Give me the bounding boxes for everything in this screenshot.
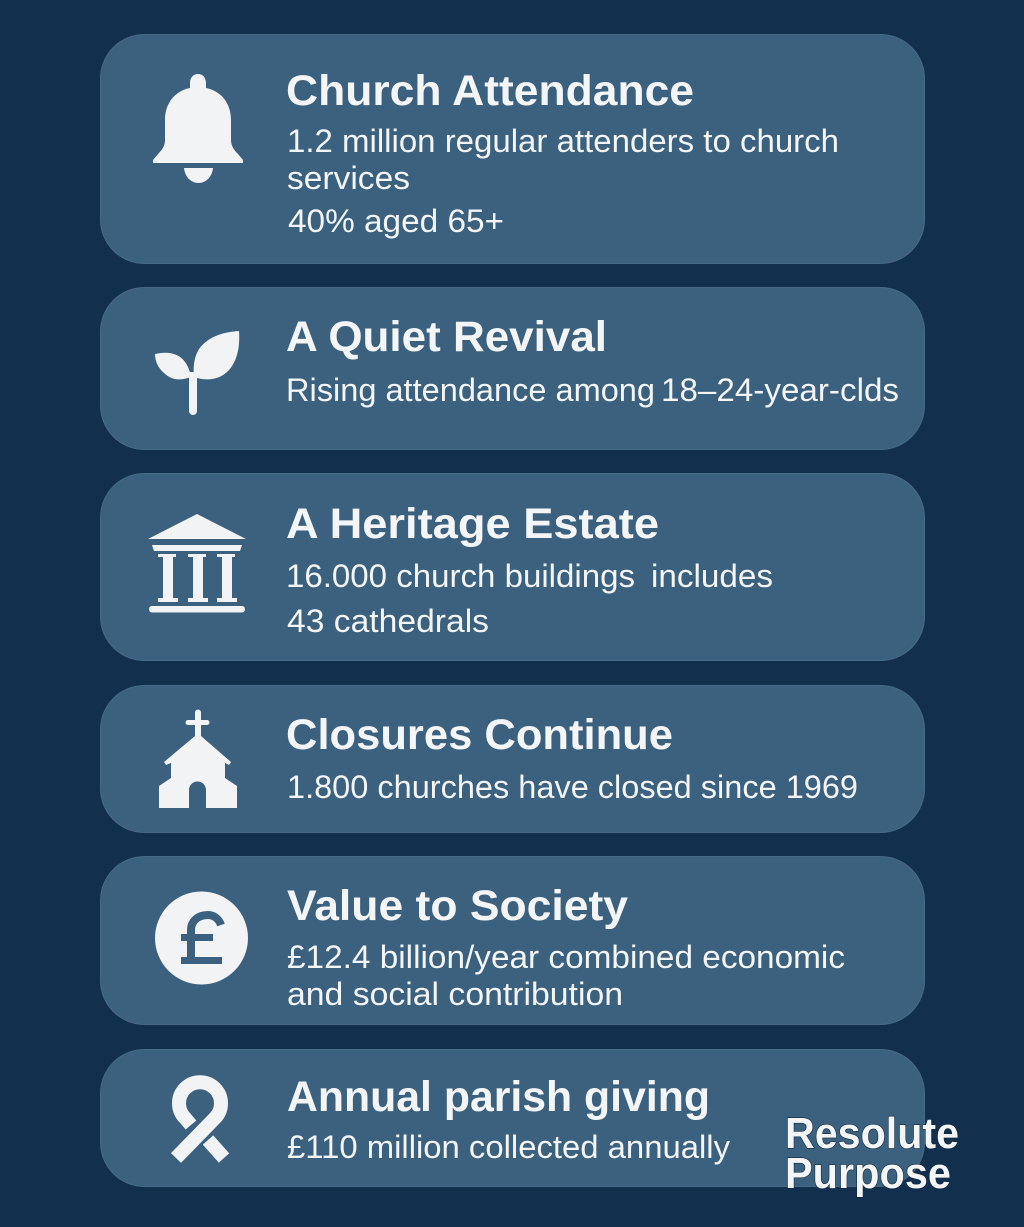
icon: sprout <box>155 331 239 415</box>
panel: a heritage estate <box>100 474 924 660</box>
icon: pound coin <box>155 892 248 984</box>
panel: value to society <box>100 856 924 1024</box>
heading: church attendance: Church Attendance <box>286 67 694 115</box>
text: rising attendance: Rising attendance among <box>286 372 655 408</box>
text: age range: 18–24-year-clds <box>661 372 899 408</box>
panel: church attendance <box>100 34 924 264</box>
panel: annual parish giving <box>100 1050 924 1186</box>
heading: closures continue: Closures Continue <box>286 711 673 759</box>
text: cathedrals: 43 cathedrals <box>287 603 489 639</box>
heading: value to society: Value to Society <box>287 882 628 930</box>
icon: ribbon <box>176 1082 224 1158</box>
text: includes: includes <box>651 558 773 594</box>
text: economic contribution: £12.4 billion/year combined economic <box>287 939 845 975</box>
heading: a quiet revival: A Quiet Revival <box>286 313 607 361</box>
text: regular attenders: 1.2 million regular attenders to church <box>287 123 839 159</box>
text: church buildings: 16.000 church buildings <box>286 558 635 594</box>
text: aged 65+: 40% aged 65+ <box>288 203 504 239</box>
icon: church <box>159 710 237 808</box>
panel: closures continue <box>100 686 924 832</box>
logo: resolute purpose: Resolute <box>785 1109 959 1158</box>
logo: resolute purpose: Purpose <box>785 1149 951 1198</box>
text: services: services <box>287 160 410 196</box>
icon: bell <box>153 74 243 183</box>
panel: a quiet revival <box>100 288 924 450</box>
icon: classical building <box>148 514 246 612</box>
text: social contribution: and social contribution <box>287 976 623 1012</box>
text: collected annually: £110 million collected annually <box>287 1129 730 1165</box>
text: closures since 1969: 1.800 churches have closed since 1969 <box>287 769 858 805</box>
logo: resolute purpose <box>785 1109 959 1198</box>
heading: a heritage estate: A Heritage Estate <box>286 500 659 548</box>
heading: annual parish giving: Annual parish giving <box>287 1073 710 1121</box>
